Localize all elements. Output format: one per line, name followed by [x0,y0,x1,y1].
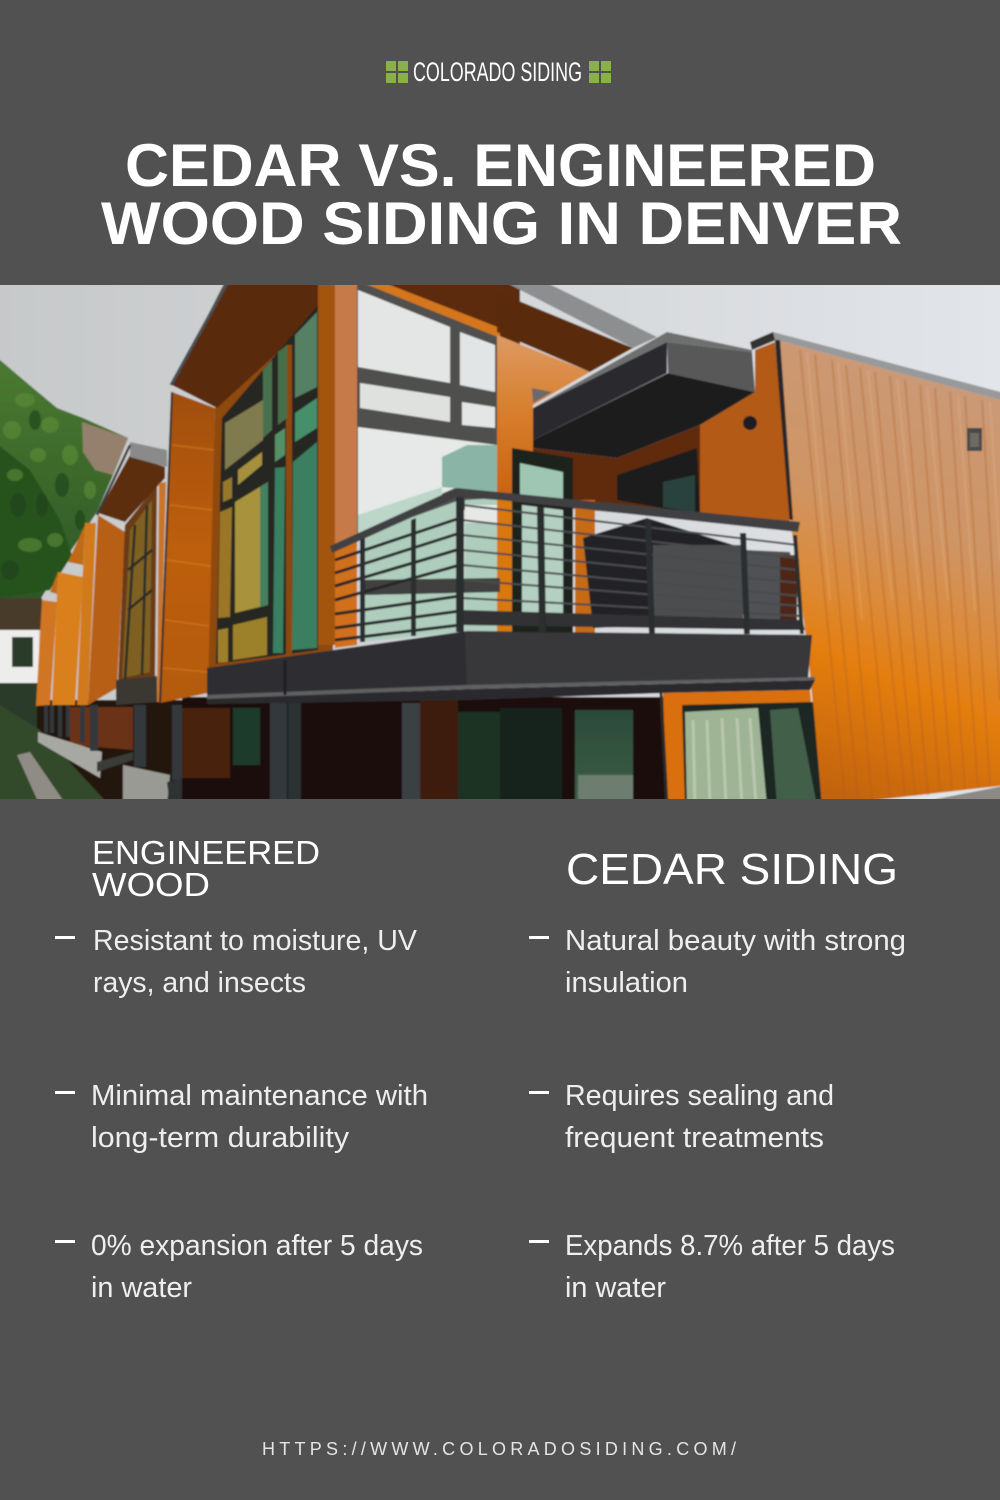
awning [533,373,755,458]
balcony beam [207,631,812,702]
heading: cedar siding: CEDAR SIDING [566,845,898,894]
side wall [777,340,1000,806]
bullet: insulation: insulation [565,967,688,999]
bullet: expansion: 0% expansion after 5 days [91,1230,423,1262]
lower storey [181,696,666,799]
logo: Colorado Siding: COLORADO SIDING [413,57,582,87]
bullet: expansion: in water [91,1272,192,1304]
bullet: sealing [529,1080,834,1154]
website url: HTTPS://WWW.COLORADOSIDING.COM/ [262,1439,736,1459]
bullet: sealing: frequent treatments [565,1122,824,1154]
bullet: expansion: in water [565,1272,666,1304]
bullet: sealing: Requires sealing and [565,1080,834,1112]
far blocks [0,598,42,630]
bullet: insulation [529,925,906,999]
balcony railing [335,540,357,648]
bullet: insulation: Natural beauty with strong [565,925,906,957]
bullet: resistance: Resistant to moisture, UV [93,925,418,957]
bullet: maintenance: long-term durability [91,1122,350,1154]
bullet: expansion: Expands 8.7% after 5 days [565,1230,895,1262]
upper roof and orange wall [497,335,590,500]
panel: cedar siding [529,845,906,1304]
bullet: expansion [529,1230,895,1304]
bullet: expansion [55,1230,423,1304]
photo: modern wood-sided townhouses [0,275,1000,815]
title: WOOD SIDING IN DENVER [101,190,902,257]
lower right window [663,690,822,806]
heading: engineered wood: WOOD [92,866,210,903]
bullet: resistance [55,925,418,999]
bullet: maintenance [55,1080,428,1154]
upper wall, first block [207,352,334,669]
title: CEDAR VS. ENGINEERED [125,132,876,199]
ground and stone base [0,706,104,799]
tall windows [216,305,318,664]
bullet: maintenance: Minimal maintenance with [91,1080,428,1112]
central column and windows [318,278,335,645]
recessed wall and door [533,425,700,520]
heading: engineered wood: ENGINEERED [92,834,320,871]
bullet: resistance: rays, and insects [93,967,306,999]
panel: engineered wood [55,834,428,1304]
title [101,132,902,257]
heading: engineered wood [92,834,320,903]
